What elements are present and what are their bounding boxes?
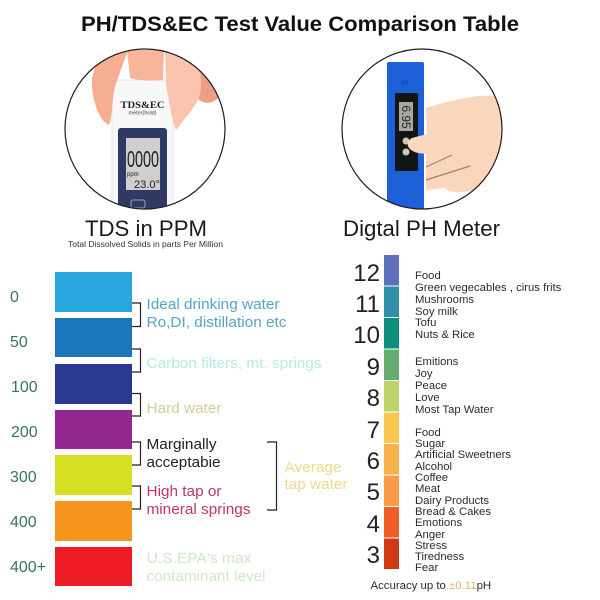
TDS range descriptions: High tap or <box>146 483 222 500</box>
TDS range descriptions: contaminant level <box>146 568 266 585</box>
TDS range descriptions: Average <box>284 459 342 476</box>
TDS range descriptions: acceptabie <box>146 454 220 471</box>
heading: TDS in PPM: TDS in PPM <box>85 216 207 241</box>
TDS range descriptions <box>146 296 348 585</box>
pH descriptions: Most Tap Water <box>415 404 494 416</box>
pH descriptions: Artificial Sweetners <box>415 449 511 461</box>
pH descriptions: Alcohol <box>415 461 452 473</box>
TDS scale labels: 200 <box>11 424 38 441</box>
pH descriptions: Meat <box>415 483 441 495</box>
pH scale numbers: 7 <box>367 417 380 444</box>
pH descriptions: Soy milk <box>415 306 458 318</box>
TDS range descriptions: Ro,DI, distillation etc <box>146 314 287 331</box>
pH scale numbers: 8 <box>367 385 380 412</box>
pH descriptions: Tiredness <box>415 551 465 563</box>
pH descriptions: Stress <box>415 540 447 552</box>
TDS colour bars <box>55 272 132 586</box>
pH descriptions: Food <box>415 270 441 282</box>
TDS scale labels: 400+ <box>10 559 46 576</box>
TDS range descriptions: Carbon filters, mt. springs <box>146 355 322 372</box>
TDS range descriptions: Marginally <box>146 436 217 453</box>
pH scale numbers: 3 <box>367 542 380 569</box>
icon: pH meter in circle: pH <box>401 80 409 86</box>
icon: pH meter in circle: 6.95 <box>399 105 413 129</box>
TDS scale labels: 100 <box>11 379 38 396</box>
pH descriptions: Sugar <box>415 438 445 450</box>
icon: pH meter in circle <box>342 49 510 212</box>
icon: TDS meter in circle: meter(hold) <box>128 110 157 116</box>
title: PH/TDS&EC Test Value Comparison Table <box>81 13 519 36</box>
pH scale numbers <box>353 260 380 569</box>
heading: digital pH meter: Digtal PH Meter <box>343 216 500 241</box>
TDS range descriptions: mineral springs <box>146 501 250 518</box>
pH descriptions <box>415 270 562 574</box>
pH descriptions: Mushrooms <box>415 294 474 306</box>
icon: TDS meter in circle: TDS&EC <box>120 101 165 111</box>
icon: TDS meter in circle: 23.0° <box>134 179 160 191</box>
pH scale numbers: 10 <box>353 322 380 349</box>
pH scale numbers: 9 <box>367 354 380 381</box>
TDS scale labels: 50 <box>10 334 28 351</box>
pH descriptions: Peace <box>415 380 447 392</box>
TDS range descriptions: Hard water <box>146 400 222 417</box>
accuracy note: Accuracy up to ±0.11pH <box>370 580 491 592</box>
pH descriptions: Coffee <box>415 472 448 484</box>
pH descriptions: Bread & Cakes <box>415 506 491 518</box>
pH scale numbers: 5 <box>367 479 380 506</box>
pH descriptions: Dairy Products <box>415 495 489 507</box>
pH descriptions: Emitions <box>415 356 459 368</box>
pH descriptions: Fear <box>415 562 438 574</box>
TDS scale labels: 300 <box>10 469 37 486</box>
caption: total dissolved solids: Total Dissolved Solids in parts Per Million <box>68 240 223 249</box>
pH descriptions: Love <box>415 392 440 404</box>
pH descriptions: Green vegecables , cirus frits <box>415 282 562 294</box>
TDS scale labels <box>10 289 46 576</box>
pH descriptions: Nuts & Rice <box>415 329 475 341</box>
icon: TDS meter in circle: 0000 <box>127 146 159 172</box>
icon: TDS meter in circle: ppm <box>127 172 139 178</box>
TDS range descriptions: Ideal drinking water <box>146 296 280 313</box>
pH descriptions: Anger <box>415 529 445 541</box>
pH scale numbers: 12 <box>353 260 380 287</box>
brackets between bars <box>132 303 140 509</box>
TDS range descriptions: U.S.EPA's max <box>146 550 252 567</box>
pH colour bar <box>384 255 399 569</box>
pH descriptions: Food <box>415 427 441 439</box>
pH scale numbers: 11 <box>355 291 380 318</box>
pH scale numbers: 4 <box>367 511 380 538</box>
TDS range descriptions: tap water <box>284 476 348 493</box>
pH scale numbers: 6 <box>367 448 380 475</box>
TDS scale labels: 400 <box>10 514 37 531</box>
pH descriptions: Joy <box>415 368 433 380</box>
bracket: average tap water <box>267 442 276 510</box>
pH descriptions: Tofu <box>415 317 436 329</box>
pH descriptions: Emotions <box>415 517 462 529</box>
icon: TDS meter in circle <box>65 49 225 215</box>
TDS scale labels: 0 <box>10 289 19 306</box>
